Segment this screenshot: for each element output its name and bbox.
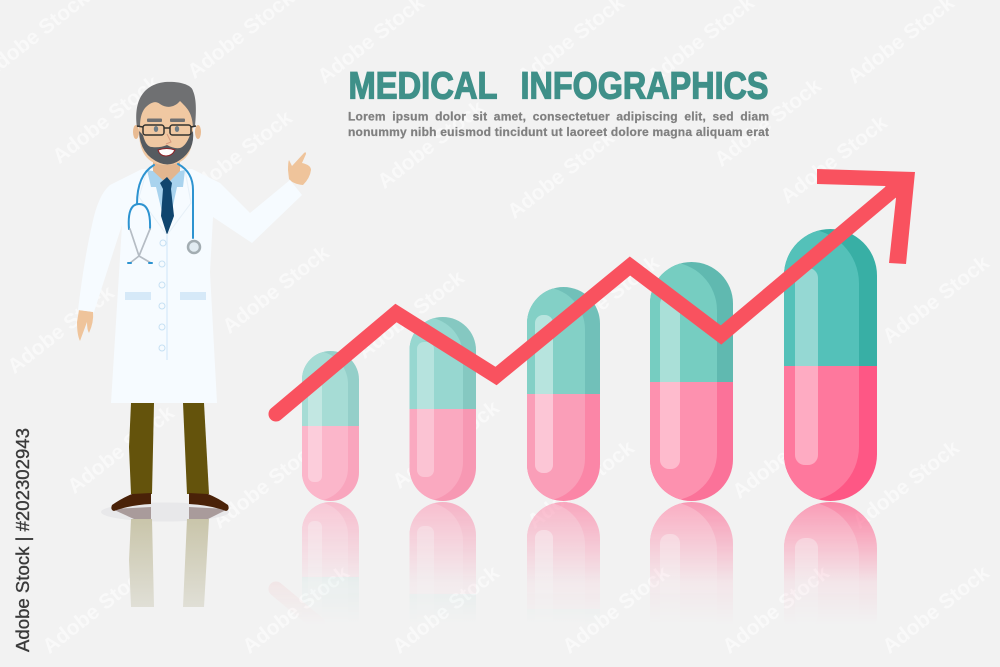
stock watermarks: Adobe Stock <box>728 406 844 503</box>
glasses <box>137 125 196 135</box>
face <box>139 95 193 165</box>
stock watermarks: Adobe Stock <box>63 401 179 498</box>
stock watermarks: Adobe Stock <box>388 561 504 658</box>
stock watermarks: Adobe Stock <box>218 241 334 338</box>
growth arrow <box>276 169 915 414</box>
stock watermarks: Adobe Stock <box>503 126 619 223</box>
mouth <box>158 148 175 156</box>
text block: lorem ipsum description <box>348 110 769 139</box>
text block: lorem ipsum description: nonummy nibh euismod tincidunt ut laoreet dolore magna aliquam erat <box>348 125 769 139</box>
ears <box>133 125 201 139</box>
stock watermarks: Adobe Stock <box>776 111 892 208</box>
hand: right pointing <box>288 152 311 185</box>
eyes <box>154 126 179 132</box>
stock watermarks: Adobe Stock <box>373 96 489 193</box>
beard <box>139 131 193 164</box>
doctor <box>77 82 311 511</box>
stock watermarks: Adobe Stock <box>848 436 964 533</box>
trousers <box>129 403 209 494</box>
stock watermarks: Adobe Stock <box>181 106 297 203</box>
stock watermarks: Adobe Stock <box>3 281 119 378</box>
stock id side label: Adobe Stock | #202302943 <box>13 428 33 652</box>
stock watermarks: Adobe Stock <box>238 561 354 658</box>
stock watermarks: Adobe Stock <box>48 71 164 168</box>
coat buttons <box>159 240 166 351</box>
nose <box>166 134 171 144</box>
stock watermarks: Adobe Stock <box>710 74 826 171</box>
pockets <box>125 292 206 300</box>
capsule bar 1 <box>302 351 359 501</box>
lab coat <box>78 169 302 403</box>
stock watermarks: Adobe Stock <box>523 436 639 533</box>
doctor reflection and floor shadow <box>101 502 229 607</box>
stock watermarks: Adobe Stock <box>388 396 504 493</box>
stock watermarks: Adobe Stock <box>878 561 994 658</box>
eyebrows <box>147 118 185 122</box>
lapels and coat details <box>139 170 191 360</box>
title: INFOGRAPHICS <box>520 66 768 108</box>
necktie <box>160 177 174 235</box>
stock watermarks: Adobe Stock <box>548 251 664 348</box>
hand: left <box>77 310 93 341</box>
capsule bar 5 <box>784 229 877 501</box>
shoes <box>111 493 229 511</box>
stethoscope <box>128 164 200 263</box>
pill reflections <box>268 502 877 604</box>
capsule bar 2 <box>409 317 477 501</box>
stock watermarks: Adobe Stock <box>878 251 994 348</box>
stock watermarks: Adobe Stock <box>558 561 674 658</box>
shirt collar <box>147 170 185 233</box>
stock watermarks: Adobe Stock <box>38 561 154 658</box>
text block: lorem ipsum description: Lorem ipsum dolor sit amet, consectetuer adipiscing elit, sed diam <box>348 110 769 124</box>
stock watermarks: Adobe Stock <box>718 561 834 658</box>
neck <box>153 160 180 190</box>
stock watermarks: Adobe Stock <box>208 436 324 533</box>
title: MEDICAL <box>348 66 498 108</box>
capsule bar 4 <box>650 262 733 501</box>
hair <box>136 82 196 127</box>
title <box>348 66 768 108</box>
capsule bar 3 <box>527 287 600 501</box>
stock watermarks: Adobe Stock <box>353 266 469 363</box>
